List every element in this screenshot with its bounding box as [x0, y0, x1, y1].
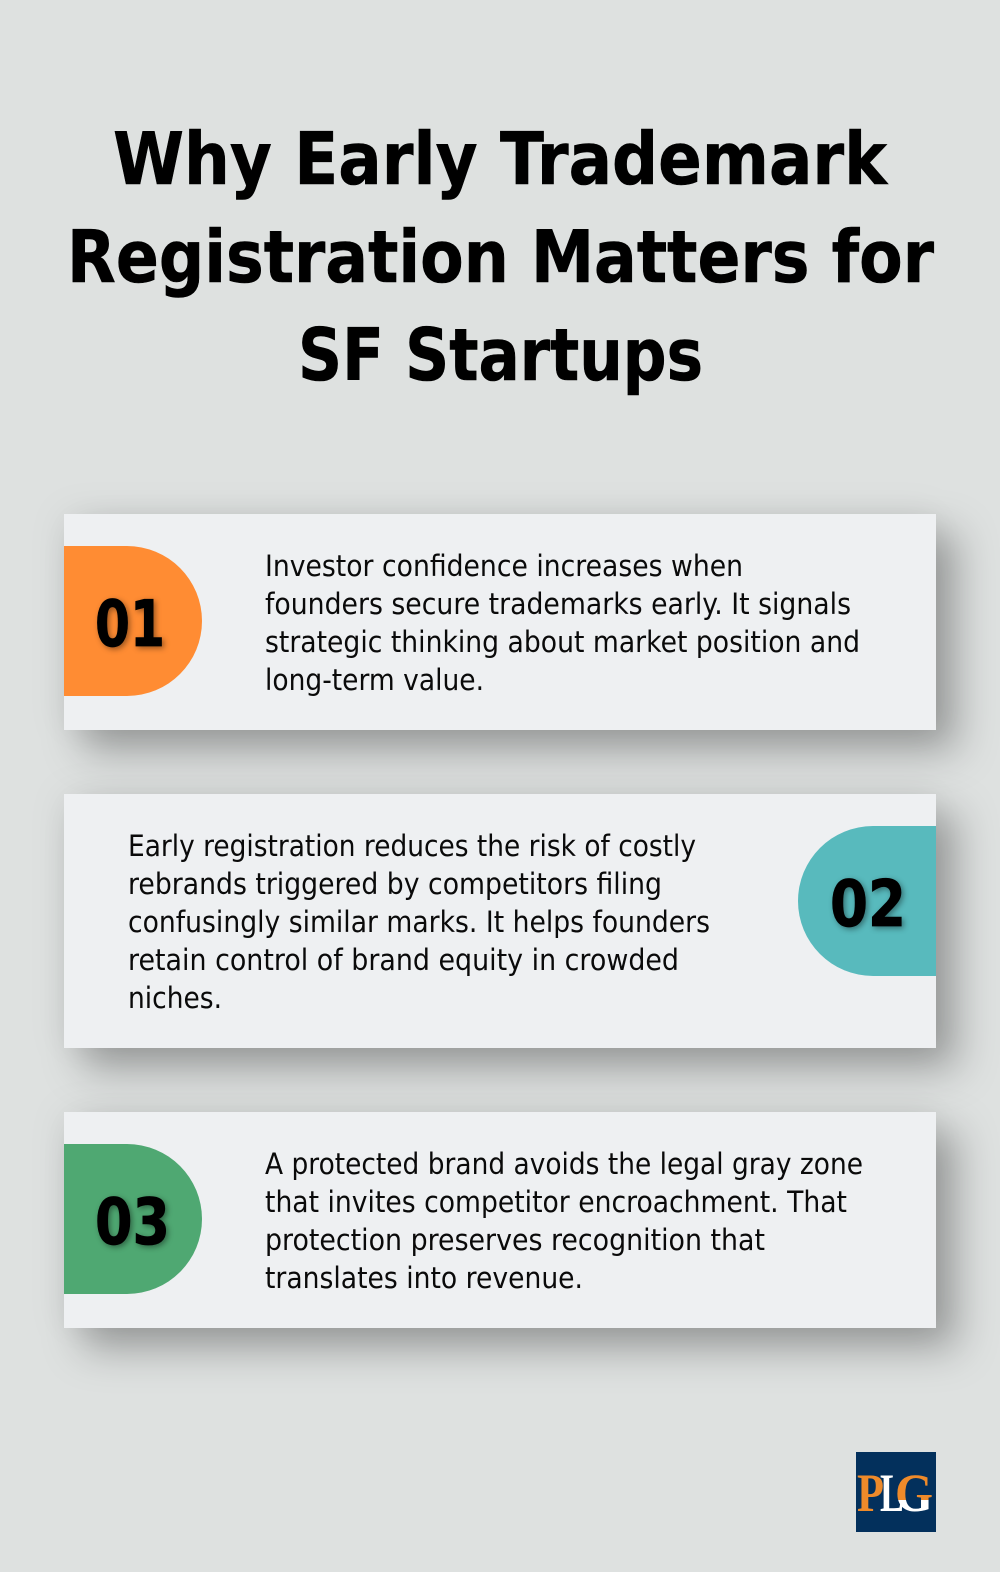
- badge: 03: [64, 1144, 202, 1294]
- text: investor confidence: strategic thinking about market position and: [265, 625, 860, 659]
- text: protected brand: translates into revenue.: [265, 1261, 583, 1295]
- badge: 02: [798, 826, 936, 976]
- title: [67, 117, 934, 397]
- text: investor confidence: [265, 549, 860, 697]
- icon: PLG logo: P: [857, 1463, 884, 1523]
- badge: 02: 02: [830, 868, 906, 942]
- badge: 03: 03: [95, 1186, 170, 1260]
- text: protected brand: A protected brand avoids the legal gray zone: [265, 1147, 863, 1181]
- text: protected brand: [265, 1147, 863, 1295]
- text: investor confidence: founders secure trademarks early. It signals: [265, 587, 851, 621]
- panel: card 01 investor confidence: [64, 514, 936, 730]
- text: protected brand: that invites competitor encroachment. That: [265, 1185, 847, 1219]
- icon: PLG logo: L: [880, 1463, 904, 1523]
- icon: PLG logo: G: [895, 1463, 933, 1523]
- icon: PLG logo: [856, 1452, 936, 1532]
- panel: card 02 costly rebrands: [64, 794, 936, 1048]
- text: protected brand: protection preserves recognition that: [265, 1223, 765, 1257]
- text: costly rebrands: [128, 829, 710, 1015]
- text: costly rebrands: retain control of brand equity in crowded: [128, 943, 679, 977]
- title: Why Early Trademark: [113, 117, 889, 201]
- text: investor confidence: Investor confidence increases when: [265, 549, 743, 583]
- title: SF Startups: [298, 313, 703, 397]
- text: costly rebrands: rebrands triggered by competitors filing: [128, 867, 662, 901]
- text: investor confidence: long-term value.: [265, 663, 484, 697]
- text: costly rebrands: Early registration reduces the risk of costly: [128, 829, 696, 863]
- badge: 01: 01: [95, 588, 165, 662]
- text: costly rebrands: niches.: [128, 981, 222, 1015]
- panel: card 03 protected brand: [64, 1112, 936, 1328]
- text: costly rebrands: confusingly similar marks. It helps founders: [128, 905, 710, 939]
- badge: 01: [64, 546, 202, 696]
